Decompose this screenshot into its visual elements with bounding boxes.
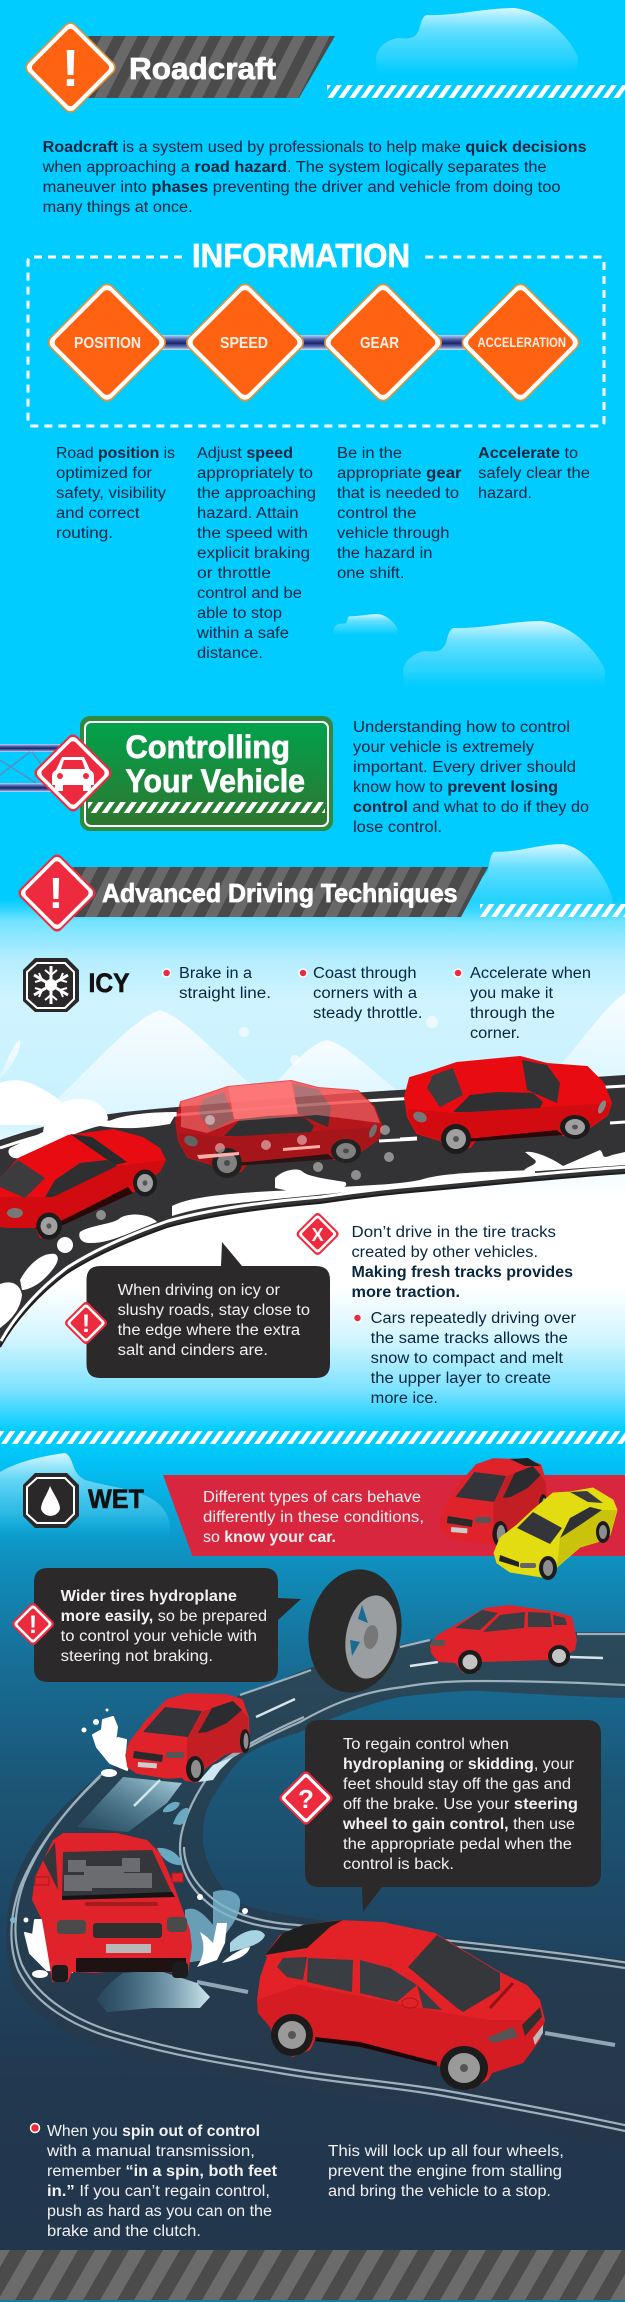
bullet: repeated tracks: Cars repeatedly driving over <box>371 1310 576 1327</box>
text: speed: hazard. Attain <box>197 505 298 522</box>
splash: front mpv <box>10 1890 265 2012</box>
sign: position <box>45 280 169 405</box>
text: speed: the speed with <box>197 525 308 542</box>
sign: controlling your vehicle <box>80 716 333 831</box>
heading: WET: WET <box>88 1484 144 1514</box>
road dashes <box>197 1657 615 2045</box>
tip: tire tracks: created by other vehicles. <box>352 1244 538 1261</box>
text: position <box>56 445 175 542</box>
header: Roadcraft: ! <box>62 40 79 98</box>
callout: icy roads <box>63 1242 330 1378</box>
text: speed: explicit braking <box>197 545 310 562</box>
wet road <box>6 1632 625 2150</box>
text: speed <box>196 445 316 662</box>
panel: information <box>28 237 604 426</box>
sign: speed: SPEED <box>220 335 268 352</box>
panel: information: INFORMATION <box>192 237 410 274</box>
text: lock up wheels: This will lock up all four wheels, <box>328 2143 564 2160</box>
text: speed: control and be <box>197 585 302 602</box>
callout: icy roads: the edge where the extra <box>118 1322 300 1339</box>
callout: icy roads: salt and cinders are. <box>118 1342 268 1359</box>
text: acceleration: Accelerate to <box>478 445 578 462</box>
text: position: and correct <box>56 505 140 522</box>
text: position: optimized for <box>56 465 152 482</box>
text: gear <box>337 445 462 582</box>
text: lock up wheels: prevent the engine from stalling <box>328 2163 562 2180</box>
car: sedan right <box>405 1057 611 1154</box>
tip: tire tracks: Don’t drive in the tire tracks <box>352 1224 556 1241</box>
connector bars <box>107 335 520 350</box>
text: lock up wheels <box>328 2143 564 2200</box>
text: speed: or throttle <box>197 565 271 582</box>
car: ghost overlay <box>181 1081 380 1159</box>
cloud behind band <box>455 844 612 923</box>
icon: orange warning diamond <box>22 19 119 116</box>
text: gear: that is needed to <box>337 485 459 502</box>
bullet: repeated tracks <box>354 1310 576 1407</box>
text: position: safety, visibility <box>56 485 166 502</box>
intro paragraph: when approaching a road hazard . The system logically separates the <box>42 159 547 176</box>
car: ghost sedan <box>176 1081 382 1178</box>
callout: regain control: control is back. <box>343 1856 454 1873</box>
text: controlling your vehicle: control and what to do if they do <box>353 799 589 816</box>
intro paragraph: Roadcraft is a system used by professionals to help make quick decisions <box>43 139 587 156</box>
icon: question diamond: ? <box>298 1784 314 1814</box>
text: gear: one shift. <box>337 565 404 582</box>
car: red mpv <box>441 1458 548 1547</box>
callout: wider tires: to control your vehicle with <box>61 1628 257 1645</box>
bullet: accelerate <box>454 965 591 1042</box>
background: sky <box>0 0 625 920</box>
header: Roadcraft: Roadcraft <box>129 51 276 86</box>
banner: know your car: Different types of cars behave <box>203 1489 421 1506</box>
sign: gear: GEAR <box>360 335 399 352</box>
hatch strip <box>480 904 625 917</box>
text: spin out of control: When you spin out of control <box>47 2123 260 2140</box>
text: controlling your vehicle: your vehicle is extremely <box>353 739 534 756</box>
text: position: Road position is <box>56 445 175 462</box>
icy road <box>0 1075 625 1347</box>
footer stripe <box>0 2250 625 2300</box>
sign: controlling your vehicle: Your Vehicle <box>126 763 305 799</box>
text: gear: the hazard in <box>337 545 432 562</box>
text: speed: distance. <box>197 645 263 662</box>
icon: water drop octagon <box>23 1473 79 1528</box>
callout: regain control: To regain control when <box>343 1736 509 1753</box>
text: controlling your vehicle: important. Every driver should <box>353 759 576 776</box>
text: acceleration: safely clear the <box>478 465 590 482</box>
tip: tire tracks: Making fresh tracks provides <box>352 1264 573 1281</box>
icon: red warning diamond <box>16 852 98 934</box>
callout: regain control <box>278 1720 601 1912</box>
background: wet section <box>0 1444 625 2250</box>
truss <box>0 744 60 792</box>
car: front mpv <box>32 1833 192 1982</box>
snow dots in sky <box>239 1016 603 1290</box>
icon: warning diamond: ! <box>82 1310 90 1338</box>
text: spin out of control: remember “in a spin, both feet <box>47 2163 277 2180</box>
heading: ICY: ICY <box>88 968 130 998</box>
cloud: wet section <box>0 1453 170 1540</box>
clouds middle <box>333 614 605 693</box>
text: spin out of control: push as hard as you can on the <box>47 2203 272 2220</box>
road edge lines <box>11 1634 625 2131</box>
callout: regain control: off the brake. Use your steering <box>343 1796 578 1813</box>
icon: snowflake octagon <box>23 958 79 1012</box>
sign: gear <box>321 280 445 405</box>
intro paragraph: many things at once. <box>43 199 193 216</box>
text: position: routing. <box>56 525 113 542</box>
text: lock up wheels: and bring the vehicle to a stop. <box>328 2183 551 2200</box>
header: Roadcraft <box>22 19 335 116</box>
bullet: brake: straight line. <box>179 985 271 1002</box>
icon: x diamond: X <box>312 1225 324 1245</box>
car: big mpv <box>257 1920 545 2090</box>
callout: regain control: wheel to gain control, then use <box>342 1816 575 1833</box>
sign: acceleration: ACCELERATION <box>478 335 566 350</box>
text: gear: vehicle through <box>337 525 450 542</box>
header: advanced driving techniques <box>16 852 488 934</box>
car: sedan left <box>0 1129 166 1240</box>
text: controlling your vehicle: Understanding how to control <box>353 719 570 736</box>
text: speed: able to stop <box>197 605 282 622</box>
hatch strip full width <box>0 1431 625 1444</box>
callout: icy roads: slushy roads, stay close to <box>118 1302 310 1319</box>
callout: wider tires: Wider tires hydroplane <box>61 1588 237 1605</box>
callout: regain control: the appropriate pedal when the <box>343 1836 572 1853</box>
tip: tire tracks <box>295 1211 573 1301</box>
callout: wider tires: steering not braking. <box>61 1648 213 1665</box>
icon: warning diamond <box>10 1601 56 1647</box>
text: gear: appropriate gear <box>337 465 462 482</box>
tip: tire tracks: more traction. <box>352 1284 460 1301</box>
bullet: accelerate: Accelerate when <box>470 965 591 982</box>
road edge lines <box>0 1173 625 1347</box>
text: spin out of control <box>30 2123 277 2240</box>
callout: regain control: feet should stay off the gas and <box>343 1776 571 1793</box>
text: controlling your vehicle <box>353 719 589 836</box>
callout: wider tires <box>10 1568 301 1682</box>
bullet: coast: steady throttle. <box>313 1005 422 1022</box>
text: gear: Be in the <box>337 445 402 462</box>
car: hydroplaning mpv <box>126 1694 250 1782</box>
bullet: repeated tracks: the upper layer to create <box>371 1370 551 1387</box>
icon: tire <box>299 1562 411 1700</box>
text: speed: appropriately to <box>197 465 313 482</box>
bullet: accelerate: you make it <box>470 985 554 1002</box>
bullet: coast: corners with a <box>313 985 417 1002</box>
car: yellow sedan <box>494 1488 617 1580</box>
icon: x diamond <box>295 1211 340 1257</box>
snow blobs <box>0 1099 625 1328</box>
mountains <box>0 993 625 1125</box>
hatch strip <box>327 85 625 98</box>
bullet: repeated tracks: the same tracks allows the <box>371 1330 568 1347</box>
sign: speed <box>183 280 307 405</box>
banner: know your car: so know your car. <box>203 1529 336 1546</box>
text: speed: within a safe <box>196 625 289 642</box>
bullet: brake <box>163 965 271 1002</box>
banner: know your car: differently in these conditions, <box>203 1509 424 1526</box>
splash: hydroplane car <box>82 1708 233 1782</box>
text: speed: Adjust speed <box>197 445 293 462</box>
water trail <box>77 1777 182 1832</box>
icon: car diamond <box>32 732 114 814</box>
text: acceleration: hazard. <box>478 485 532 502</box>
text: spin out of control: with a manual transmission, <box>46 2143 255 2160</box>
text: speed: the approaching <box>197 485 316 502</box>
sign: acceleration <box>458 280 583 405</box>
bullet: repeated tracks: snow to compact and melt <box>371 1350 564 1367</box>
car: red mpv side <box>430 1605 577 1674</box>
icon: question diamond <box>278 1770 334 1826</box>
callout: regain control: hydroplaning or skidding, your <box>343 1756 574 1773</box>
cloud top <box>376 8 578 80</box>
road snow dots <box>96 1115 394 1220</box>
intro paragraph: maneuver into phases preventing the driver and vehicle from doing too <box>43 179 561 196</box>
text: gear: control the <box>337 505 416 522</box>
text: spin out of control: in.” If you can’t regain control, <box>47 2183 270 2200</box>
intro paragraph <box>42 139 587 216</box>
icon: warning diamond <box>63 1300 109 1346</box>
text: acceleration <box>478 445 590 502</box>
icon: warning diamond: ! <box>29 1611 37 1639</box>
bullet: accelerate: corner. <box>470 1025 520 1042</box>
text: controlling your vehicle: know how to prevent losing <box>353 779 558 796</box>
callout: icy roads: When driving on icy or <box>118 1282 280 1299</box>
road dashes <box>379 1122 625 1141</box>
sign: position: POSITION <box>74 335 141 352</box>
text: controlling your vehicle: lose control. <box>353 819 442 836</box>
bullet: accelerate: through the <box>470 1005 555 1022</box>
header: advanced driving techniques: ! <box>49 869 63 918</box>
text: spin out of control: brake and the clutch. <box>47 2223 201 2240</box>
banner: know your car <box>163 1475 625 1556</box>
sign: controlling your vehicle: Controlling <box>126 729 290 765</box>
bullet: brake: Brake in a <box>179 965 252 982</box>
callout: wider tires: more easily, so be prepared <box>61 1608 267 1625</box>
background: icy section <box>0 900 625 1431</box>
bullet: coast: Coast through <box>313 965 416 982</box>
bullet: repeated tracks: more ice. <box>371 1390 438 1407</box>
header: advanced driving techniques: Advanced Driving Techniques <box>102 878 458 908</box>
bullet: coast <box>299 965 422 1022</box>
